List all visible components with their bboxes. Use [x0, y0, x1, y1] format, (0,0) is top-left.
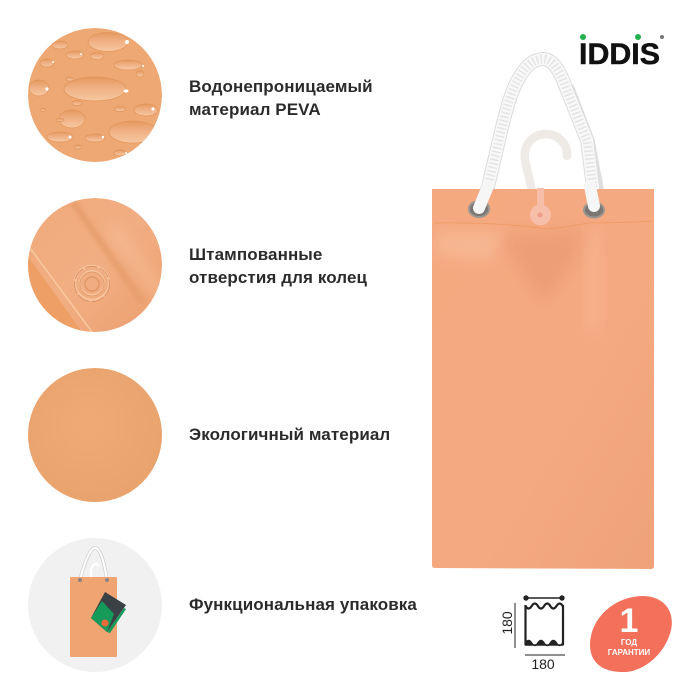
text: stamped holes: отверстия для колец — [189, 268, 367, 287]
hook tab — [530, 188, 551, 225]
text: eco material: Экологичный материал — [189, 425, 390, 444]
hook — [525, 134, 567, 191]
warranty badge: ГОД — [621, 638, 637, 647]
text: waterproof: материал PEVA — [189, 100, 321, 119]
warranty badge: 1 — [620, 602, 638, 640]
text: waterproof: Водонепроницаемый — [189, 77, 373, 96]
text: stamped holes — [189, 245, 367, 287]
bag body — [430, 186, 656, 571]
text: packaging: Функциональная упаковка — [189, 595, 417, 614]
rope ends over bag — [479, 186, 488, 208]
warranty badge: ГАРАНТИИ — [608, 648, 650, 657]
text: stamped holes: Штампованные — [189, 245, 322, 264]
photo circle: packaging — [28, 538, 162, 672]
text: waterproof — [189, 77, 373, 119]
logo: IDDIS — [579, 38, 660, 71]
photo circle: eco material — [28, 368, 162, 502]
photo circle: water drops — [28, 28, 162, 162]
size labels: 180 — [499, 611, 515, 635]
size icon — [499, 595, 565, 672]
rope handles — [479, 59, 599, 210]
eyelets — [469, 201, 489, 217]
photo circle: stamped eyelet — [25, 198, 165, 336]
warranty badge — [590, 596, 672, 672]
bag product photo — [430, 59, 656, 571]
size icon: 180 — [531, 656, 555, 672]
